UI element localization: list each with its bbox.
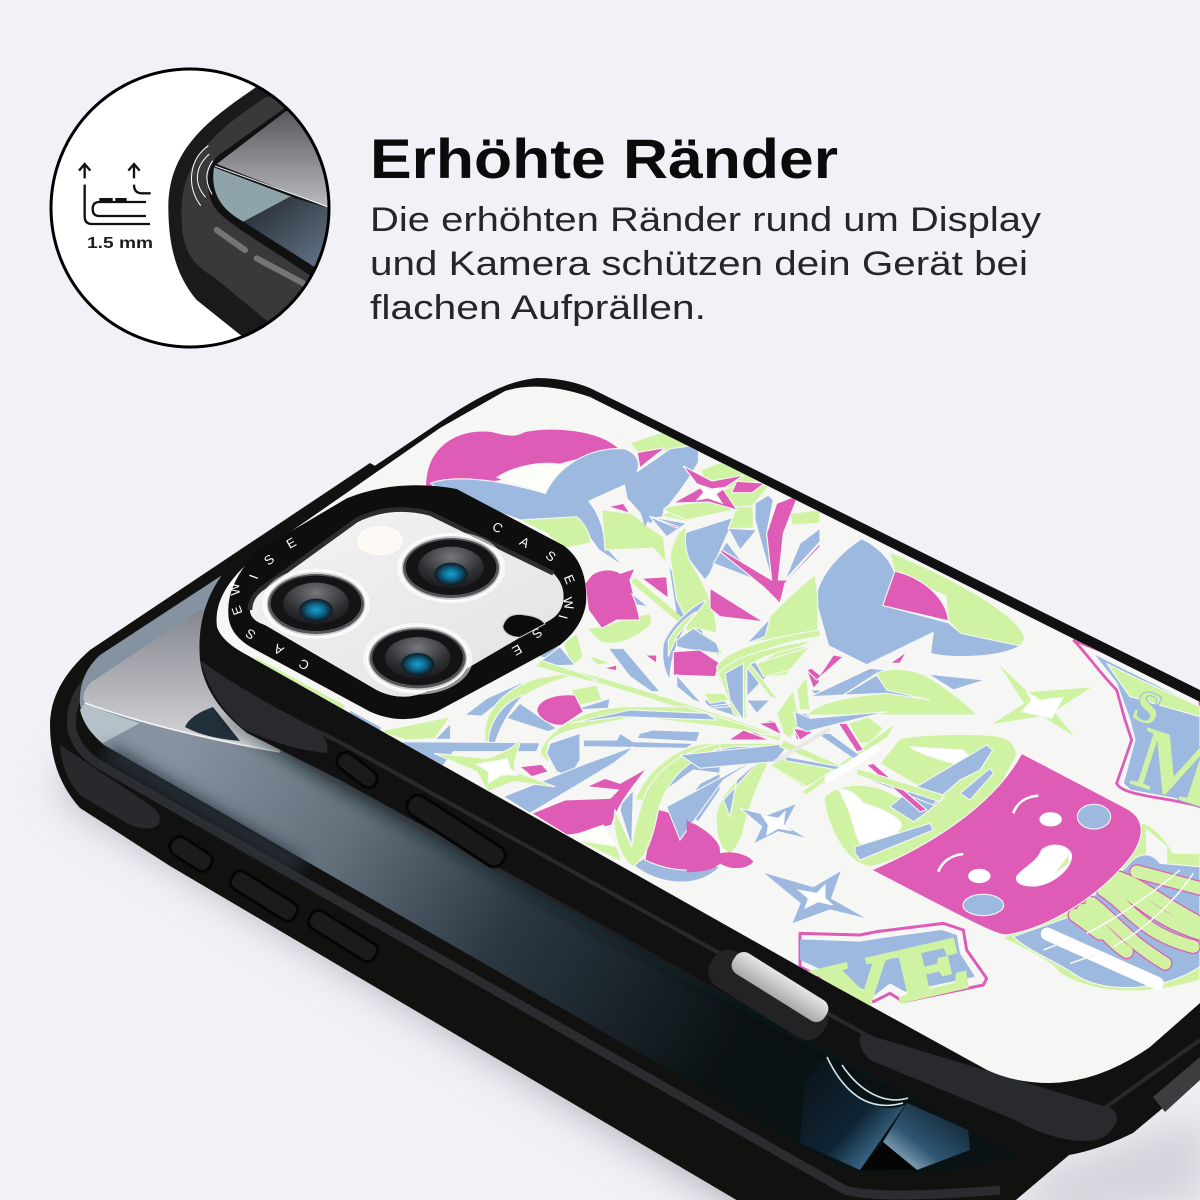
artwork: pink star [673, 466, 744, 510]
center leaves [663, 600, 707, 680]
artwork: bouquet [255, 490, 1200, 991]
blue stars [740, 803, 808, 844]
tulip [587, 613, 652, 643]
artwork: lower lettering [800, 923, 987, 1002]
blue reflections [800, 1057, 970, 1170]
screen edge shading [108, 752, 300, 866]
icon label: 1.5 mm [87, 235, 153, 252]
brand text left: CASEWISE [227, 534, 312, 673]
lidar [503, 614, 545, 637]
stems and fronds [704, 700, 769, 718]
bumper frame [50, 463, 1075, 1200]
charging port [701, 943, 835, 1047]
title: Erhöhte Ränder [370, 127, 838, 190]
description [370, 201, 1041, 327]
lens three [363, 622, 473, 694]
lens two [396, 532, 506, 604]
glass reflection [80, 610, 300, 752]
upper leaves [520, 500, 620, 563]
close-up phone corner [168, 87, 340, 340]
artwork: lips, ribbon and top flower [426, 429, 1025, 665]
description: flachen Aufprällen. [370, 289, 706, 327]
big blue flower [890, 552, 1025, 647]
callout: raised edge detail [51, 69, 340, 347]
screen [80, 485, 1040, 1173]
blue ribbon [430, 446, 699, 524]
green star [992, 666, 1091, 736]
back phone in bumper [50, 463, 1075, 1200]
flash [356, 525, 404, 556]
left fronds, pot and flower [255, 647, 722, 882]
icon: raised edge diagram [79, 164, 151, 224]
shadow cast by front phone [215, 715, 900, 1090]
jar [824, 734, 1017, 867]
artwork: upper right letters: S [1126, 679, 1169, 736]
top green [630, 430, 770, 521]
raised ring [228, 485, 586, 719]
carbon corner panels [200, 660, 1117, 1141]
lens one [261, 568, 371, 640]
carbon side panel [60, 745, 160, 828]
right leaves and jar [667, 640, 1017, 924]
case side buttons [333, 749, 509, 871]
pot flower [532, 768, 647, 835]
case bumper [199, 378, 1200, 1158]
artwork: lower lettering text: IVE [767, 922, 976, 1045]
side buttons [166, 833, 381, 965]
pink pot [872, 753, 1141, 935]
description: Die erhöhten Ränder rund um Display [370, 201, 1041, 239]
speaker grille [1153, 1057, 1200, 1112]
drop shadow [60, 720, 1200, 1200]
camera window [250, 510, 564, 697]
printed artwork [200, 370, 1200, 1100]
glass, pot face, star and lettering [872, 640, 1200, 991]
front phone in case [199, 370, 1200, 1158]
description: und Kamera schützen dein Gerät bei [370, 245, 1028, 283]
green star [434, 738, 555, 792]
upper right lettering shield [1073, 640, 1200, 807]
pink lips [426, 429, 619, 487]
brand text right: CASEWISE [490, 519, 578, 659]
camera surround [227, 485, 586, 719]
artwork: upper right letters [1130, 691, 1200, 808]
